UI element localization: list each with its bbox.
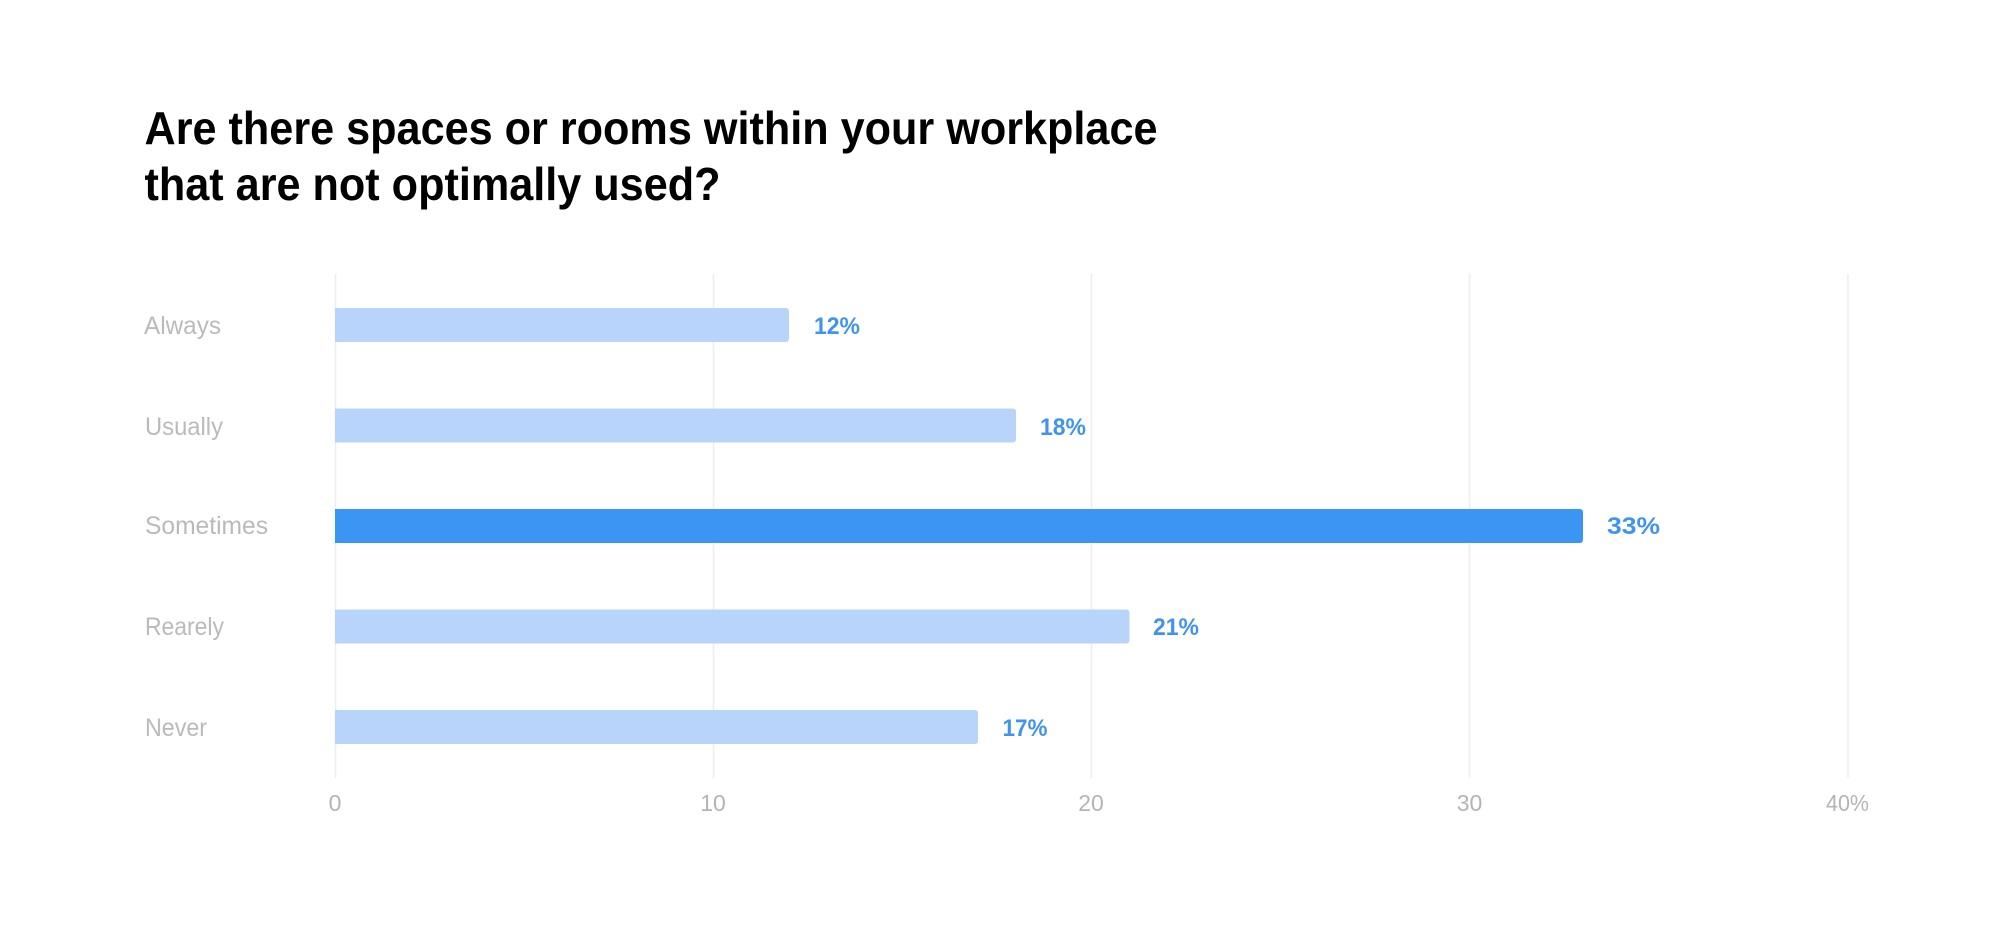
x axis labels: 30	[1457, 790, 1482, 816]
x axis labels	[329, 790, 1869, 816]
x axis labels: 0	[329, 790, 341, 816]
row: Sometimes: 33%	[1607, 513, 1660, 540]
x axis labels: 10	[700, 790, 726, 816]
row: Never	[145, 710, 1048, 744]
row: Never: Never	[145, 714, 207, 742]
row: Rearely: 21%	[1153, 614, 1199, 641]
row: Always: 12%	[814, 313, 860, 340]
row: Usually	[145, 408, 1086, 442]
row: Always: Always	[144, 312, 221, 340]
x axis labels: 20	[1078, 790, 1104, 816]
row: Usually: Usually	[145, 413, 223, 441]
row: Usually: 18%	[1040, 414, 1086, 441]
title	[144, 102, 1158, 210]
row: Sometimes: Sometimes	[145, 512, 268, 540]
row: Always	[144, 308, 860, 342]
row: Sometimes	[145, 509, 1660, 543]
chart: horizontal bar chart	[144, 274, 1869, 816]
title: that are not optimally used?	[144, 158, 720, 210]
row: Never: 17%	[1002, 715, 1048, 742]
row: Rearely	[145, 610, 1199, 644]
row: Rearely: Rearely	[145, 613, 224, 641]
x axis labels: 40%	[1826, 790, 1869, 816]
title: Are there spaces or rooms within your workplace	[144, 102, 1158, 154]
